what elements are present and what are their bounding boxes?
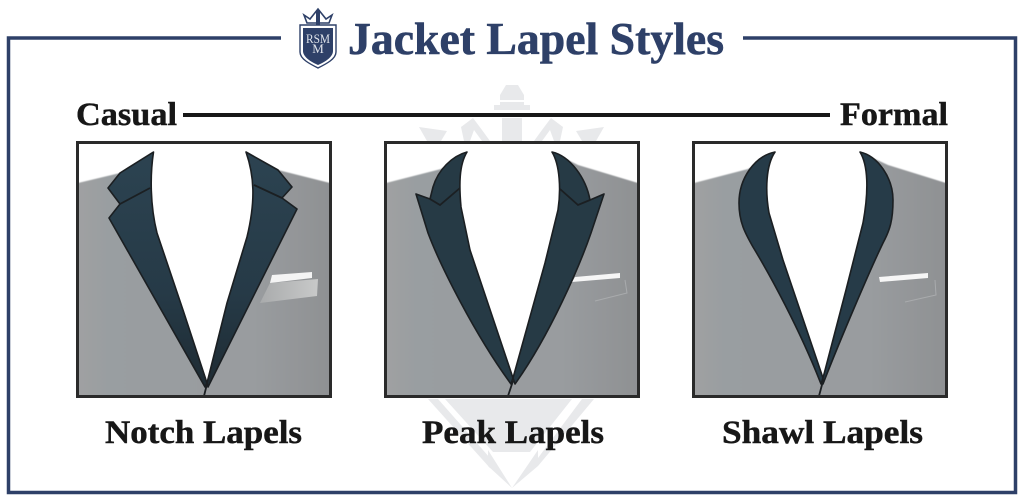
left lapel <box>416 152 513 384</box>
icon: crest logo: RSM <box>306 31 330 46</box>
right lapel <box>513 152 604 384</box>
heading text: Jacket Lapel Styles <box>348 13 724 64</box>
pocket <box>879 273 936 302</box>
label: casual: Casual <box>76 97 177 133</box>
frame background <box>386 142 638 396</box>
panel: peak lapels <box>386 142 638 396</box>
shirt <box>767 150 867 378</box>
lapel seams <box>430 188 590 396</box>
shirt <box>151 150 253 383</box>
shirt <box>460 150 560 378</box>
icon: crest logo: M <box>312 41 324 56</box>
right lapel <box>207 152 297 387</box>
panel border <box>694 142 946 396</box>
panel border <box>78 142 330 396</box>
frame background <box>78 142 330 396</box>
lapel seams <box>120 185 282 396</box>
watermark crest <box>419 85 604 488</box>
jacket body <box>386 152 638 396</box>
button seam <box>819 381 823 396</box>
left lapel <box>108 152 207 387</box>
jacket body <box>694 152 946 396</box>
frame background <box>694 142 946 396</box>
caption: shawl lapels: Shawl Lapels <box>722 415 923 451</box>
caption: peak lapels: Peak Lapels <box>422 415 604 451</box>
pocket <box>572 273 627 301</box>
label: formal: Formal <box>840 97 948 133</box>
panel border <box>386 142 638 396</box>
panel: notch lapels <box>78 142 330 396</box>
scale: casual to formal <box>76 97 948 133</box>
title <box>300 9 724 68</box>
jacket body <box>78 152 330 396</box>
scale line <box>183 113 830 117</box>
left lapel <box>739 152 823 384</box>
panel: shawl lapels <box>694 142 946 396</box>
caption: notch lapels: Notch Lapels <box>105 415 302 451</box>
icon: crest logo <box>300 9 336 68</box>
pocket <box>260 272 318 303</box>
right lapel <box>823 152 893 384</box>
